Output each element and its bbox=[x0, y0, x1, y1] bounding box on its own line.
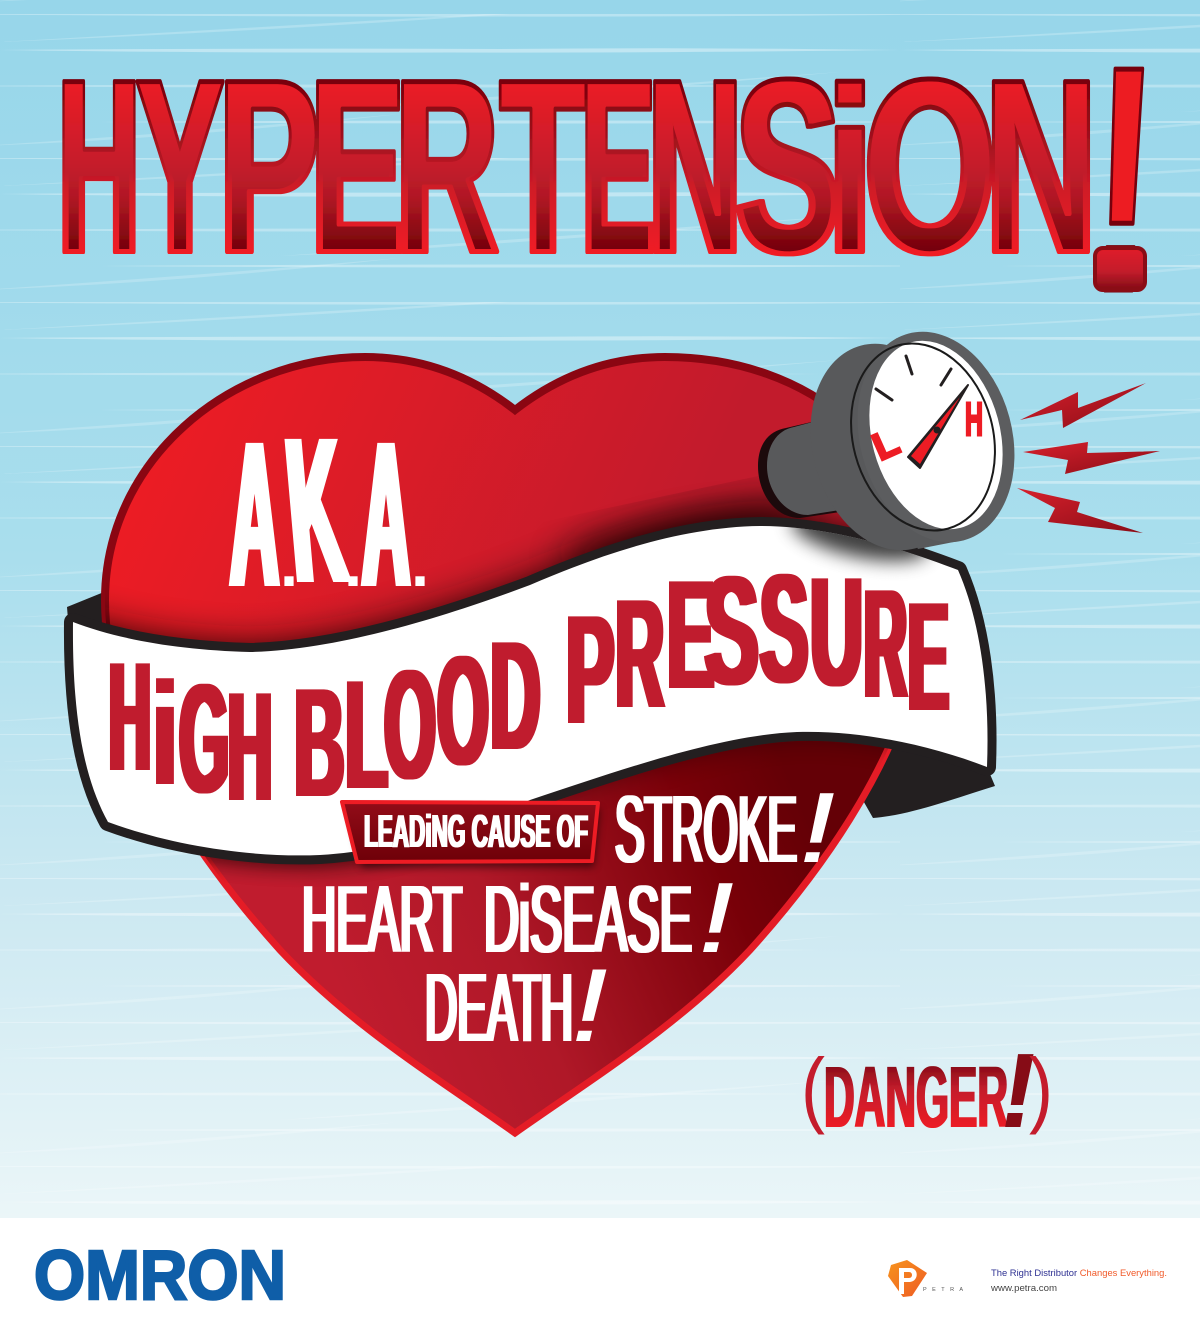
title: Hypertension!: E bbox=[581, 28, 656, 304]
title: Hypertension!: N bbox=[985, 28, 1097, 304]
banner text: High Blood Pressure: O bbox=[437, 624, 489, 797]
a.k.a. heading: A bbox=[230, 399, 279, 631]
banner text: High Blood Pressure: H bbox=[228, 660, 272, 833]
title: Hypertension!: Y bbox=[137, 28, 223, 304]
gauge needle bbox=[908, 385, 968, 468]
banner text: High Blood Pressure: S bbox=[760, 542, 808, 715]
gauge body bbox=[830, 338, 964, 549]
text: heart disease!: HEART bbox=[302, 866, 462, 973]
title: Hypertension!: P bbox=[218, 28, 319, 304]
tag: leading cause of bbox=[342, 802, 600, 868]
a.k.a. heading: K bbox=[278, 394, 354, 627]
danger callout: ) bbox=[1029, 1041, 1053, 1135]
text: death!: DEATH bbox=[425, 953, 573, 1062]
heart bbox=[73, 357, 988, 1133]
title: Hypertension! bbox=[58, 0, 1160, 359]
lightning bolts bbox=[1017, 383, 1160, 533]
tag: leading cause of: LEADiNG CAUSE OF bbox=[364, 805, 588, 857]
text: A bbox=[362, 399, 410, 631]
gauge shadow on banner bbox=[780, 527, 935, 576]
text: stroke! bbox=[615, 772, 846, 884]
gauge face bbox=[849, 326, 1023, 544]
text: stroke!: ! bbox=[792, 772, 846, 884]
text: heart disease!: ! bbox=[691, 862, 745, 974]
danger callout: DANGER bbox=[824, 1049, 1008, 1146]
banner back fold bbox=[67, 592, 995, 818]
banner text: High Blood Pressure: R bbox=[616, 567, 664, 740]
banner text: High Blood Pressure: E bbox=[667, 548, 714, 721]
petra tagline: The Right Distributor Changes Everything. bbox=[991, 1268, 1167, 1279]
title: Hypertension!: N bbox=[648, 28, 742, 304]
banner text: High Blood Pressure: G bbox=[179, 652, 229, 825]
title: Hypertension!: R bbox=[395, 28, 499, 304]
ribbon banner bbox=[73, 526, 988, 855]
title: Hypertension!: i bbox=[827, 38, 873, 302]
text: E bbox=[908, 570, 949, 743]
text: death! bbox=[425, 948, 618, 1064]
gauge ticks bbox=[876, 356, 951, 400]
banner text: High Blood Pressure: H bbox=[109, 630, 151, 803]
banner text: High Blood Pressure: U bbox=[810, 545, 863, 718]
title: Hypertension!: T bbox=[501, 28, 585, 304]
petra logo: P E T R A bbox=[923, 1287, 963, 1293]
pressure gauge bbox=[758, 314, 1037, 568]
banner text: High Blood Pressure bbox=[109, 542, 949, 833]
banner text: High Blood Pressure: O bbox=[384, 638, 436, 811]
a.k.a. heading: . bbox=[344, 527, 362, 600]
a.k.a. heading: . bbox=[411, 527, 429, 600]
banner text: High Blood Pressure: S bbox=[705, 544, 759, 717]
text: stroke!: STROKE bbox=[615, 776, 797, 883]
danger callout: ! bbox=[991, 1031, 1048, 1150]
banner text: High Blood Pressure: B bbox=[294, 656, 344, 829]
banner text: High Blood Pressure: i bbox=[153, 652, 177, 815]
title: Hypertension!: S bbox=[735, 28, 841, 304]
petra logo bbox=[888, 1260, 963, 1297]
text: death!: ! bbox=[564, 948, 618, 1064]
title: Hypertension!: E bbox=[310, 28, 405, 304]
gauge labels: L bbox=[867, 421, 906, 469]
text: heart disease!: DiSEASE bbox=[484, 866, 692, 973]
footer bbox=[0, 1218, 1200, 1336]
a.k.a. heading: . bbox=[280, 527, 298, 600]
gauge labels: H bbox=[965, 393, 983, 445]
banner text: High Blood Pressure: L bbox=[345, 648, 388, 821]
banner text: High Blood Pressure: R bbox=[864, 557, 907, 730]
danger callout bbox=[801, 1031, 1053, 1150]
gauge labels bbox=[867, 393, 983, 469]
petra website: www.petra.com bbox=[990, 1283, 1057, 1294]
omron logo: OMRON bbox=[34, 1236, 286, 1314]
title: Hypertension!: O bbox=[864, 28, 996, 304]
title: Hypertension!: H bbox=[58, 28, 140, 304]
danger callout: ( bbox=[801, 1041, 825, 1135]
banner text: High Blood Pressure: P bbox=[566, 583, 614, 756]
banner text: High Blood Pressure: D bbox=[490, 609, 540, 782]
gauge stem bbox=[758, 420, 840, 518]
